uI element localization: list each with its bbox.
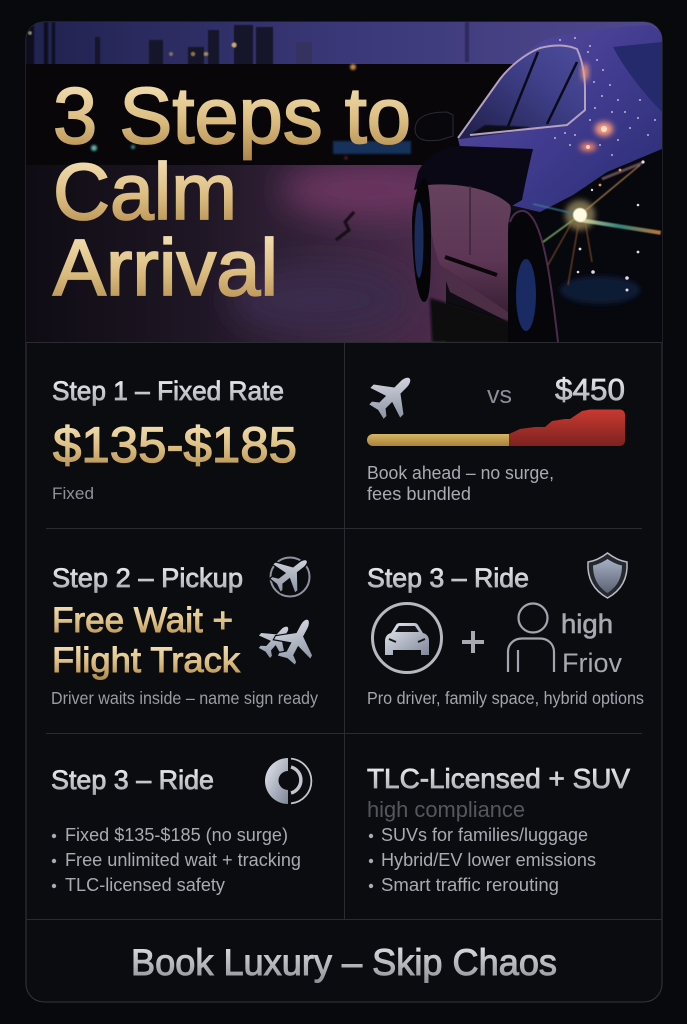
- wet road: [110, 165, 446, 342]
- bar: surge fare: [509, 410, 625, 446]
- plus sign: [462, 631, 484, 653]
- road crack: [336, 212, 354, 240]
- bullet list: SUVs for families/luggage: [381, 825, 588, 845]
- caption: Driver waits inside – name sign ready: [51, 688, 318, 708]
- subheading: high compliance: [367, 797, 525, 822]
- bullet list: TLC-licensed safety: [65, 875, 225, 895]
- title: [52, 86, 408, 297]
- heading: TLC-Licensed + SUV: [367, 763, 630, 794]
- panel: ride summary: [51, 758, 311, 895]
- icon: car in circle: [372, 604, 442, 672]
- panel: hero photo: [26, 22, 662, 342]
- sparkles: [554, 37, 656, 291]
- garbled label: Friov: [562, 648, 622, 678]
- caption: [367, 463, 554, 504]
- title: 3 Steps to: [53, 71, 411, 160]
- heading: Step 1 – Fixed Rate: [52, 376, 284, 406]
- surge price: $450: [555, 372, 625, 407]
- caption: Book ahead – no surge,: [367, 463, 554, 483]
- icon: half disc: [265, 758, 311, 804]
- garbled label: high: [561, 609, 613, 639]
- highlight text: Flight Track: [52, 641, 241, 680]
- panel grid lines: [26, 342, 662, 920]
- icon: twin planes: [253, 609, 327, 671]
- panel: step 1 fixed rate: [52, 376, 297, 503]
- footer call to action: Book Luxury – Skip Chaos: [131, 942, 557, 983]
- highlight text: [52, 601, 241, 680]
- bullet list: [369, 825, 596, 895]
- bullet list: Free unlimited wait + tracking: [65, 850, 301, 870]
- vs label: vs: [487, 382, 512, 409]
- bullet list: Hybrid/EV lower emissions: [381, 850, 596, 870]
- bullet list: Fixed $135-$185 (no surge): [65, 825, 288, 845]
- heading: Step 2 – Pickup: [52, 563, 243, 593]
- caption: Pro driver, family space, hybrid options: [367, 688, 644, 708]
- car: [412, 25, 662, 342]
- caption: fees bundled: [367, 484, 471, 504]
- title: Calm: [53, 147, 237, 236]
- icon: airplane: [362, 364, 424, 426]
- panel: step 2 pickup: [51, 546, 327, 708]
- panel: licensing and SUV: [367, 763, 630, 895]
- dark treeline band: [26, 64, 513, 165]
- heading: Step 3 – Ride: [367, 563, 529, 593]
- bullet list: [52, 825, 301, 895]
- bullet list: Smart traffic rerouting: [381, 875, 559, 895]
- distant lights: [91, 64, 411, 160]
- heading: Step 3 – Ride: [51, 765, 214, 795]
- icon: shield: [588, 553, 627, 598]
- highlight text: Free Wait +: [52, 601, 233, 640]
- city skyline: [26, 22, 469, 66]
- panel: surge comparison: [362, 364, 625, 504]
- icon: clock plane: [264, 546, 318, 600]
- price: $135-$185: [53, 417, 297, 473]
- panel: step 3 ride: [367, 553, 644, 708]
- title: Arrival: [53, 223, 278, 312]
- caption: Fixed: [52, 484, 94, 503]
- bar: fixed fare: [367, 434, 509, 446]
- icon: person: [508, 604, 554, 672]
- garbled label: [561, 609, 622, 678]
- lens flare: [533, 165, 661, 285]
